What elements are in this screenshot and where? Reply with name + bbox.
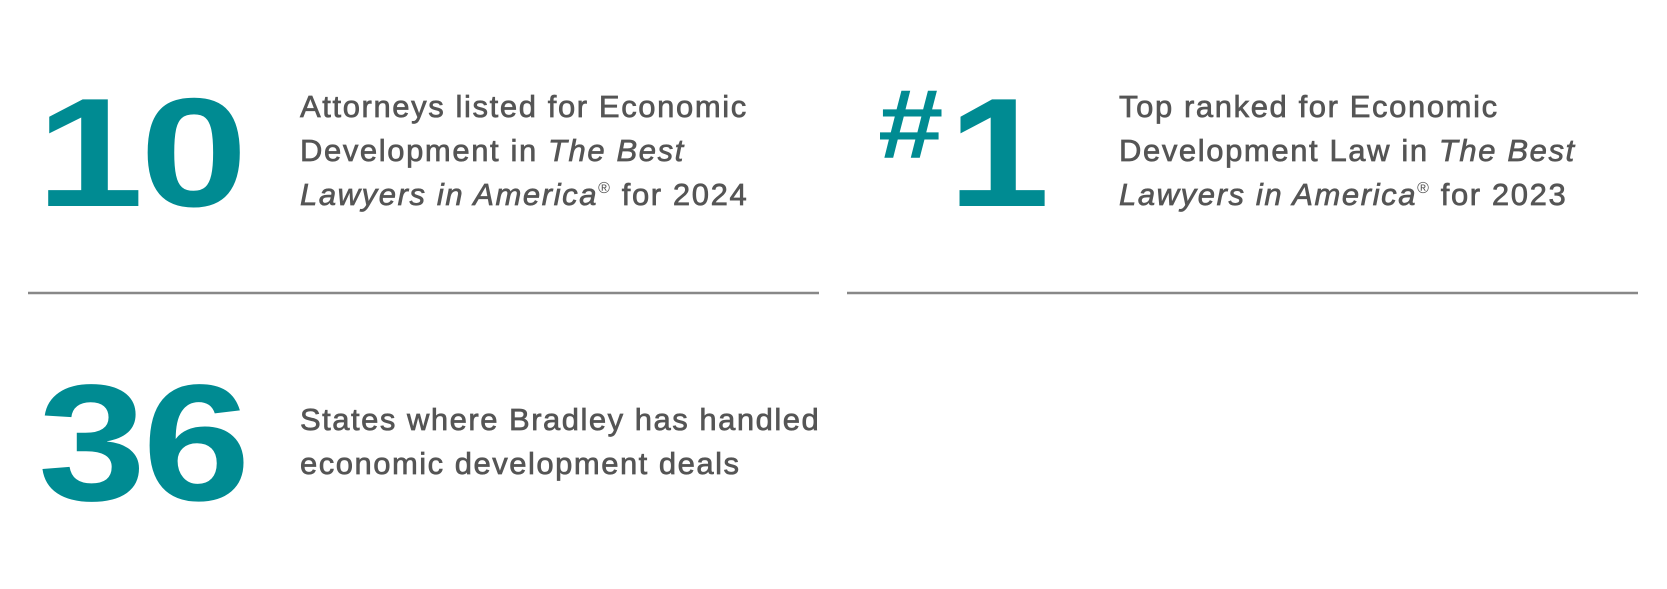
text: top ranked: Top ranked for Economic [1119, 89, 1499, 124]
text: attorneys listed: ® [598, 180, 612, 197]
text: states: economic development deals [300, 446, 741, 481]
text: top ranked: Lawyers in America [1119, 177, 1417, 212]
stat: 10 attorneys [36, 66, 758, 240]
text: attorneys listed: Attorneys listed for Economic [300, 89, 748, 124]
text: top ranked: ® [1417, 180, 1431, 197]
number 1: 1 [948, 66, 1050, 239]
number 36: 36 [38, 350, 247, 536]
text: states: States where Bradley has handled [300, 402, 820, 437]
stat: 36 states [38, 350, 830, 536]
stat: #1 ranked [878, 66, 1586, 239]
text: top ranked: Development Law in The Best [1119, 133, 1576, 168]
text: top ranked: for 2023 [1431, 177, 1567, 212]
text: attorneys listed: Development in The Best [300, 133, 685, 168]
text: attorneys listed: Lawyers in America [300, 177, 598, 212]
text: attorneys listed: for 2024 [612, 177, 748, 212]
number #: # [878, 69, 943, 179]
number 10: 10 [36, 66, 244, 240]
